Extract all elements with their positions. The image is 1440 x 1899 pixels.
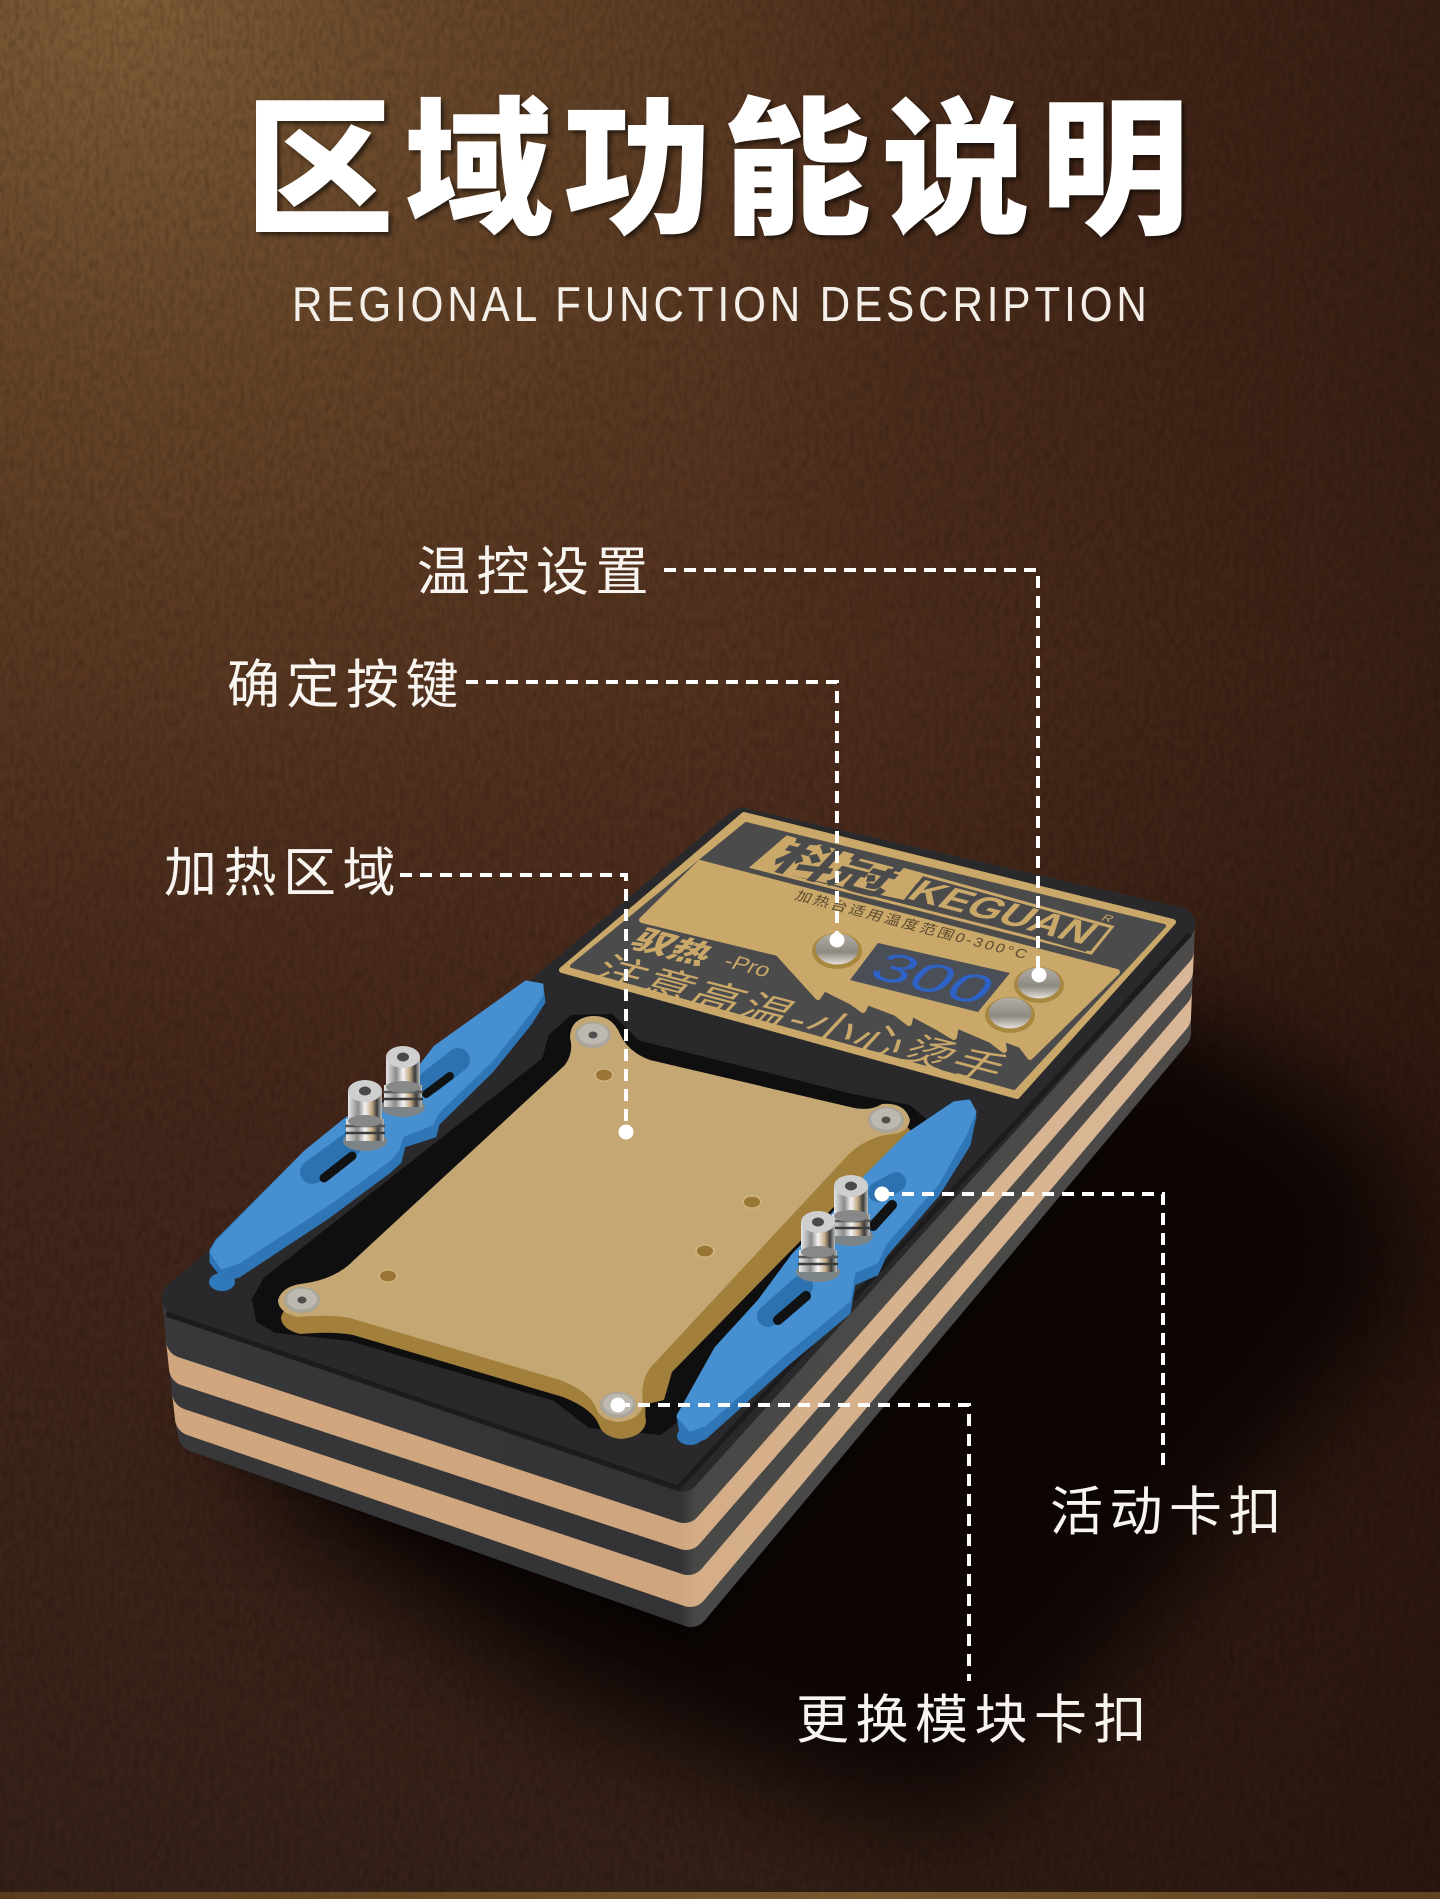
left clip bolts bbox=[343, 1046, 425, 1151]
temperature range note: 加热台适用温度范围0-300°C bbox=[792, 888, 1030, 962]
logo box: 科冠 bbox=[760, 833, 913, 904]
callout: module replacement clip bbox=[610, 1398, 1153, 1750]
recess around plate bbox=[255, 1017, 925, 1432]
warning text: 注意高温-小心烫手 bbox=[582, 951, 1016, 1089]
top face groove bbox=[166, 934, 1190, 1488]
callout: temperature setting: 温控设置 bbox=[417, 543, 655, 602]
title: 区域功能说明 bbox=[245, 87, 1199, 254]
callout: heating area bbox=[164, 844, 634, 1140]
product suffix: -Pro bbox=[720, 950, 775, 981]
callout: movable clip bbox=[874, 1186, 1288, 1542]
logo box: KEGUAN bbox=[899, 873, 1107, 951]
logo box bbox=[752, 833, 1117, 953]
LCD display: 300 bbox=[859, 944, 1006, 1013]
logo box: R bbox=[1098, 912, 1117, 925]
right blue clip bbox=[677, 1101, 975, 1445]
heating plate bbox=[278, 1016, 913, 1439]
device body: layered side stripes bbox=[180, 826, 1177, 1609]
callout: confirm key: 确定按键 bbox=[227, 656, 465, 715]
left blue clip bbox=[209, 982, 544, 1291]
callout: confirm key bbox=[227, 656, 844, 948]
subtitle: REGIONAL FUNCTION DESCRIPTION bbox=[292, 277, 1147, 332]
callout: temperature setting bbox=[417, 543, 1046, 982]
right clip bolts bbox=[796, 1175, 873, 1282]
gold field with sawtooth edge bbox=[642, 863, 1117, 1057]
buttons bbox=[812, 933, 1064, 1033]
callout: heating area: 加热区域 bbox=[164, 844, 402, 903]
control panel label bbox=[562, 815, 1173, 1096]
callout: movable clip: 活动卡扣 bbox=[1050, 1483, 1288, 1542]
device: heating station bbox=[166, 815, 1190, 1609]
callout: module replacement clip: 更换模块卡扣 bbox=[796, 1691, 1153, 1750]
product name: 驭热 bbox=[623, 925, 721, 970]
